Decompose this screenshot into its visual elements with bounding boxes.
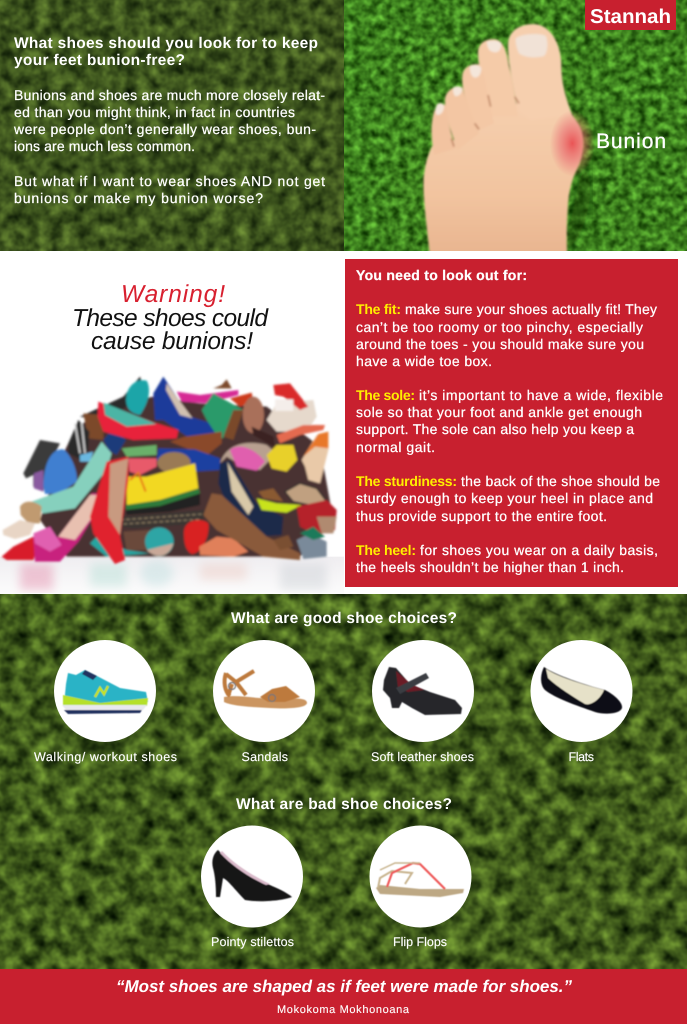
item: pointy stilettos: [201, 826, 303, 949]
text: the sole: The sole:: [356, 387, 415, 403]
icon: foot with bunion: [423, 24, 595, 257]
heading: warning: These shoes could: [72, 305, 269, 332]
text: the sole: it’s important to have a wide, flexible: [419, 387, 663, 403]
text block: bunions and shoes: Bunions and shoes are much more closely relat-: [14, 87, 325, 103]
panel: what to look out for: [345, 259, 678, 587]
text block: question: But what if I want to wear shoes AND not get: [14, 173, 325, 189]
text block: bunions and shoes: were people don’t generally wear shoes, bun-: [13, 121, 316, 137]
text: the sturdiness: The sturdiness:: [356, 473, 457, 489]
text: the fit: The fit:: [356, 301, 401, 317]
text: the sturdiness: sturdy enough to keep your heel in place and: [356, 490, 653, 506]
text: the fit: around the toes - you should make sure you: [356, 336, 644, 352]
panel: foot photo on bright grass: [334, 0, 687, 261]
item: walking shoes: Walking/ workout shoes: [34, 750, 177, 764]
text: intro: You need to look out for:: [356, 267, 527, 283]
text: the sturdiness: thus provide support to the entire foot.: [356, 508, 607, 524]
item: flip flops: [370, 826, 472, 949]
text block: bunions and shoes: ions are much less common.: [14, 138, 195, 154]
text: the sole: normal gait.: [356, 439, 435, 455]
label: Bunion: Bunion: [596, 130, 666, 153]
item: soft leather shoes: Soft leather shoes: [371, 750, 474, 764]
heading: what shoes to look for: What shoes should you look for to keep: [14, 35, 318, 52]
text: the fit: make sure your shoes actually fit! They: [405, 301, 657, 317]
text: the sturdiness: [356, 473, 660, 524]
footer: quote: [0, 969, 687, 1024]
text: the sole: sole so that your foot and ankle get enough: [356, 404, 642, 420]
item: flats: [530, 640, 632, 764]
heading: what shoes to look for: your feet bunion-free?: [14, 52, 185, 69]
heading: warning: [72, 281, 269, 355]
text block: question: bunions or make my bunion worse?: [14, 190, 263, 206]
heading: warning: Warning!: [121, 281, 225, 308]
text: the heel: for shoes you wear on a daily basis,: [420, 542, 658, 558]
text: the sole: support. The sole can also help you keep a: [356, 421, 634, 437]
text: the heel: the heels shouldn’t be higher than 1 inch.: [356, 559, 624, 575]
text: the heel: The heel:: [356, 542, 416, 558]
item: soft leather shoes: [371, 640, 474, 764]
text block: bunions and shoes: ed than you might think, in fact in countries: [14, 104, 295, 120]
panel: intro on dark grass: [0, 0, 355, 261]
heading: what shoes to look for: [14, 35, 318, 69]
item: sandals: Sandals: [242, 750, 288, 764]
text block: bunions and shoes: [13, 87, 325, 154]
quote text: “Most shoes are shaped as if feet were made for shoes.”: [116, 977, 572, 996]
text: the heel: [356, 542, 658, 575]
item: flip flops: Flip Flops: [393, 935, 447, 949]
quote attribution: Mokokoma Mokhonoana: [277, 1004, 410, 1016]
heading: bad shoe choices: What are bad shoe choices?: [236, 796, 452, 813]
text: the fit: can’t be too roomy or too pinchy, especially: [356, 319, 643, 335]
item: pointy stilettos: Pointy stilettos: [211, 935, 294, 949]
image: pile of colourful shoes: [0, 377, 344, 594]
panel: shoe choices on grass: [0, 584, 687, 979]
heading: good shoe choices: What are good shoe choices?: [231, 610, 457, 627]
logo: Stannah: [585, 0, 676, 30]
heading: warning: cause bunions!: [91, 328, 253, 355]
logo: Stannah: Stannah: [590, 6, 671, 28]
item: walking shoes: [34, 640, 177, 764]
text: the fit: have a wide toe box.: [356, 353, 492, 369]
item: sandals: [213, 640, 315, 764]
text: the sole: [356, 387, 663, 455]
text: the fit: [356, 301, 657, 369]
text: the sturdiness: the back of the shoe should be: [461, 473, 660, 489]
item: flats: Flats: [568, 750, 594, 764]
text block: question: [14, 173, 325, 206]
